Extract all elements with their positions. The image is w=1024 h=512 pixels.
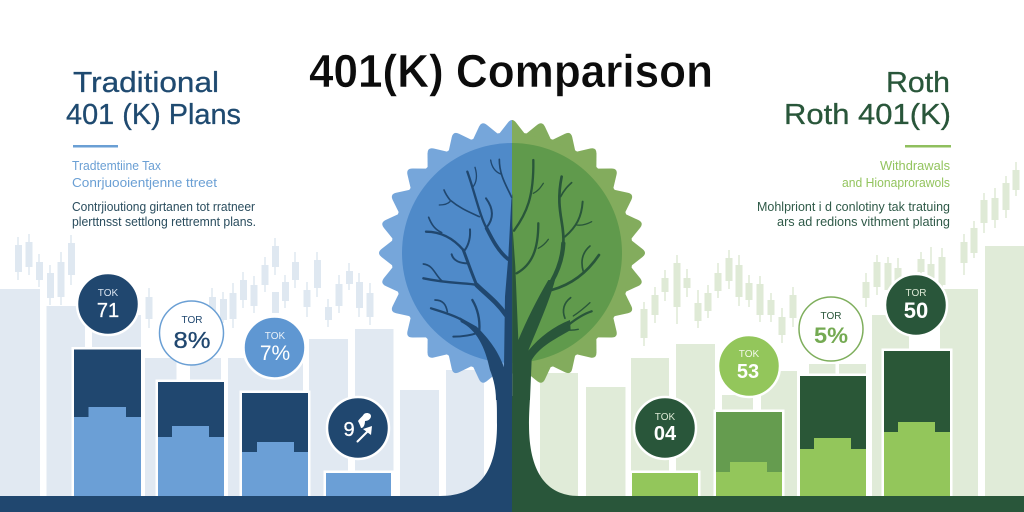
subheading: roth — [842, 158, 950, 190]
heading: roth: Roth — [886, 67, 950, 99]
badge: 71: 71 — [97, 300, 119, 322]
badge: 71 — [77, 273, 139, 335]
badge: 9 with arrow icon: 9 — [343, 419, 355, 441]
icon: arrow — [358, 413, 372, 442]
badge: 8%: 8% — [174, 327, 210, 353]
heading: roth: Roth 401(K) — [784, 99, 951, 131]
bar 3 — [240, 390, 310, 497]
body text: traditional: plerttnsst settlong rettremnt plans. — [72, 215, 256, 229]
right background bars — [540, 246, 1024, 496]
heading: roth — [784, 67, 951, 131]
badge: 53: TOK — [739, 349, 760, 360]
main title: 401(K) Comparison — [309, 45, 713, 97]
badge: 5% — [799, 297, 863, 361]
trunk and ground: green side — [512, 396, 1024, 512]
panel: roth text — [757, 67, 951, 229]
badge: 8% — [160, 301, 224, 365]
subheading: roth: and Hionaprorawols — [842, 175, 950, 190]
heading: traditional: Traditional — [73, 67, 219, 99]
badge: 71: TOK — [98, 288, 119, 299]
subheading: traditional: Tradtemtiine Tax — [72, 158, 161, 173]
badge: 5%: 5% — [814, 323, 848, 348]
left background bars — [0, 289, 484, 496]
bar 1 — [72, 347, 144, 497]
badge: 53 — [718, 335, 780, 397]
bar 5% — [798, 374, 868, 497]
badge: 8%: TOR — [182, 315, 202, 326]
badge: 53: 53 — [737, 361, 759, 383]
bar 4 — [324, 470, 394, 497]
trunk and ground: blue side — [0, 396, 512, 512]
bar 53 — [714, 410, 784, 497]
badge: 04: 04 — [654, 423, 677, 445]
badge: 04: TOK — [655, 412, 676, 423]
body text: traditional — [72, 200, 256, 229]
body text: roth: Mohlpriont i d conlotiny tak tratuing — [757, 200, 950, 214]
heading: traditional: 401 (K) Plans — [66, 99, 241, 131]
body text: roth: ars ad redions vithment plating — [777, 215, 950, 229]
panel: traditional text — [66, 67, 256, 229]
tree crown: green half — [512, 120, 645, 383]
left candlestick background — [15, 234, 374, 328]
tree crown: blue half — [379, 120, 512, 383]
tree branches: green side — [512, 160, 599, 400]
bar 50 — [882, 348, 952, 497]
right candlestick background — [640, 162, 1020, 346]
bar 04 — [630, 470, 700, 497]
bar 2 — [156, 380, 226, 497]
badge: 7%: 7% — [260, 342, 290, 365]
left foreground bars — [72, 347, 394, 497]
badge: 50: TOR — [906, 288, 926, 299]
subheading: traditional: Conrjuooientjenne ttreet — [72, 175, 217, 190]
badge: 50 — [885, 274, 947, 336]
badge: 5%: TOR — [821, 311, 841, 322]
right foreground bars — [630, 348, 952, 497]
badge: 04 — [634, 397, 696, 459]
badge: 7% — [244, 316, 306, 378]
badge: 9 with arrow icon — [327, 397, 389, 459]
body text: roth — [757, 200, 950, 229]
badge: 50: 50 — [904, 298, 928, 323]
subheading: roth: Withdrawals — [880, 158, 950, 173]
subheading: traditional — [72, 158, 217, 190]
badge: 7%: TOK — [265, 331, 286, 342]
tree branches: blue side — [423, 159, 512, 400]
body text: traditional: Contrjioutiong girtanen tot rratneer — [72, 200, 255, 214]
heading: traditional — [66, 67, 241, 131]
